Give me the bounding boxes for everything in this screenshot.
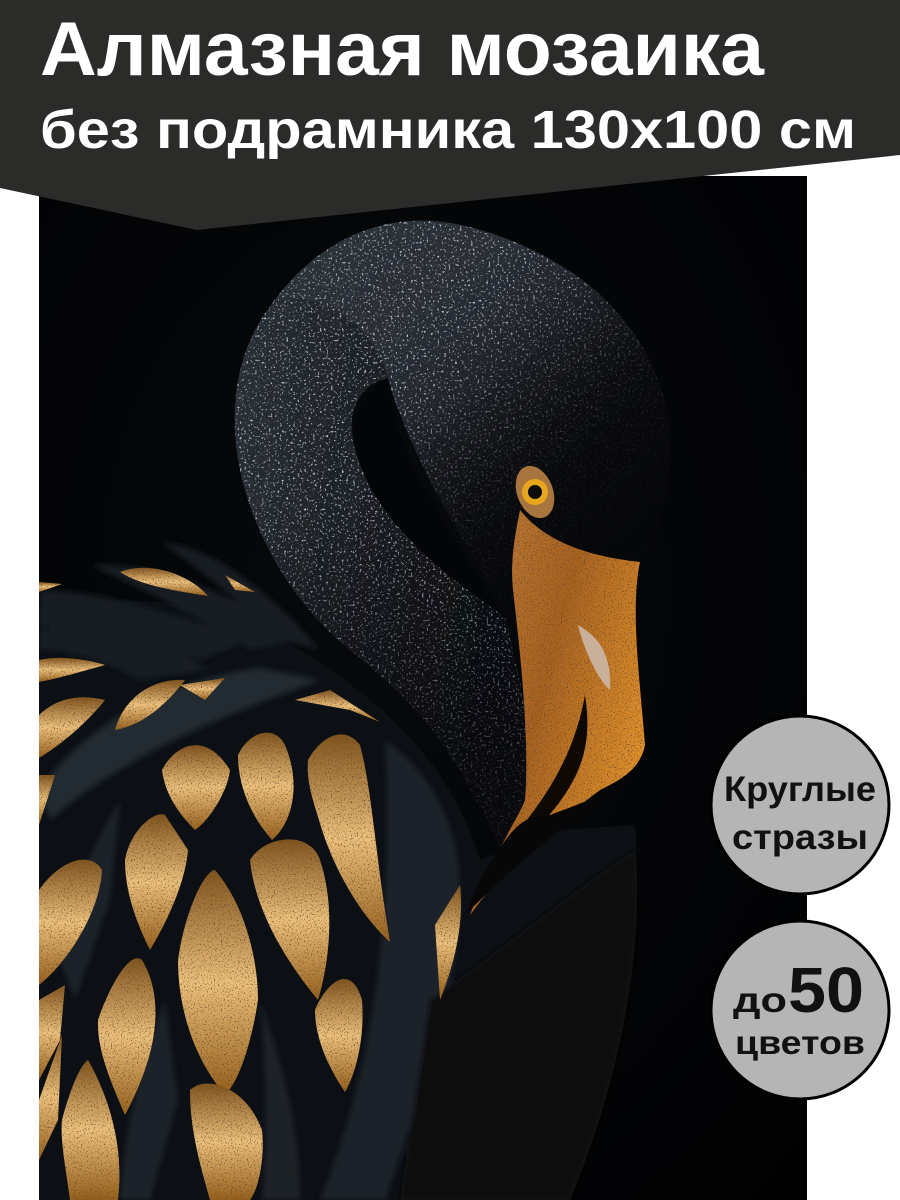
badge: up to 50 colours: цветов [735,1024,865,1061]
beak tip [466,801,586,913]
neck [234,289,526,847]
eye [516,466,554,518]
gold feathers [39,568,461,1200]
beak [470,510,645,915]
back feathers [39,542,637,1200]
photo: black flamingo [39,176,807,1200]
badge: up to 50 colours: до [733,981,787,1020]
neck inner shadow [355,378,507,618]
badge: round rhinestones [711,716,889,894]
badge: round rhinestones: Круглые [724,770,876,809]
head [275,221,670,612]
title: Алмазная мозаика [40,7,765,92]
subtitle: без подрамника 130х100 см [40,100,856,160]
badge: up to 50 colours [711,921,889,1099]
beak highlights [578,625,610,690]
header banner [0,0,900,230]
badge: up to 50 colours: 50 [788,954,864,1026]
flamingo body [39,600,637,1200]
badge: round rhinestones: стразы [732,818,868,857]
